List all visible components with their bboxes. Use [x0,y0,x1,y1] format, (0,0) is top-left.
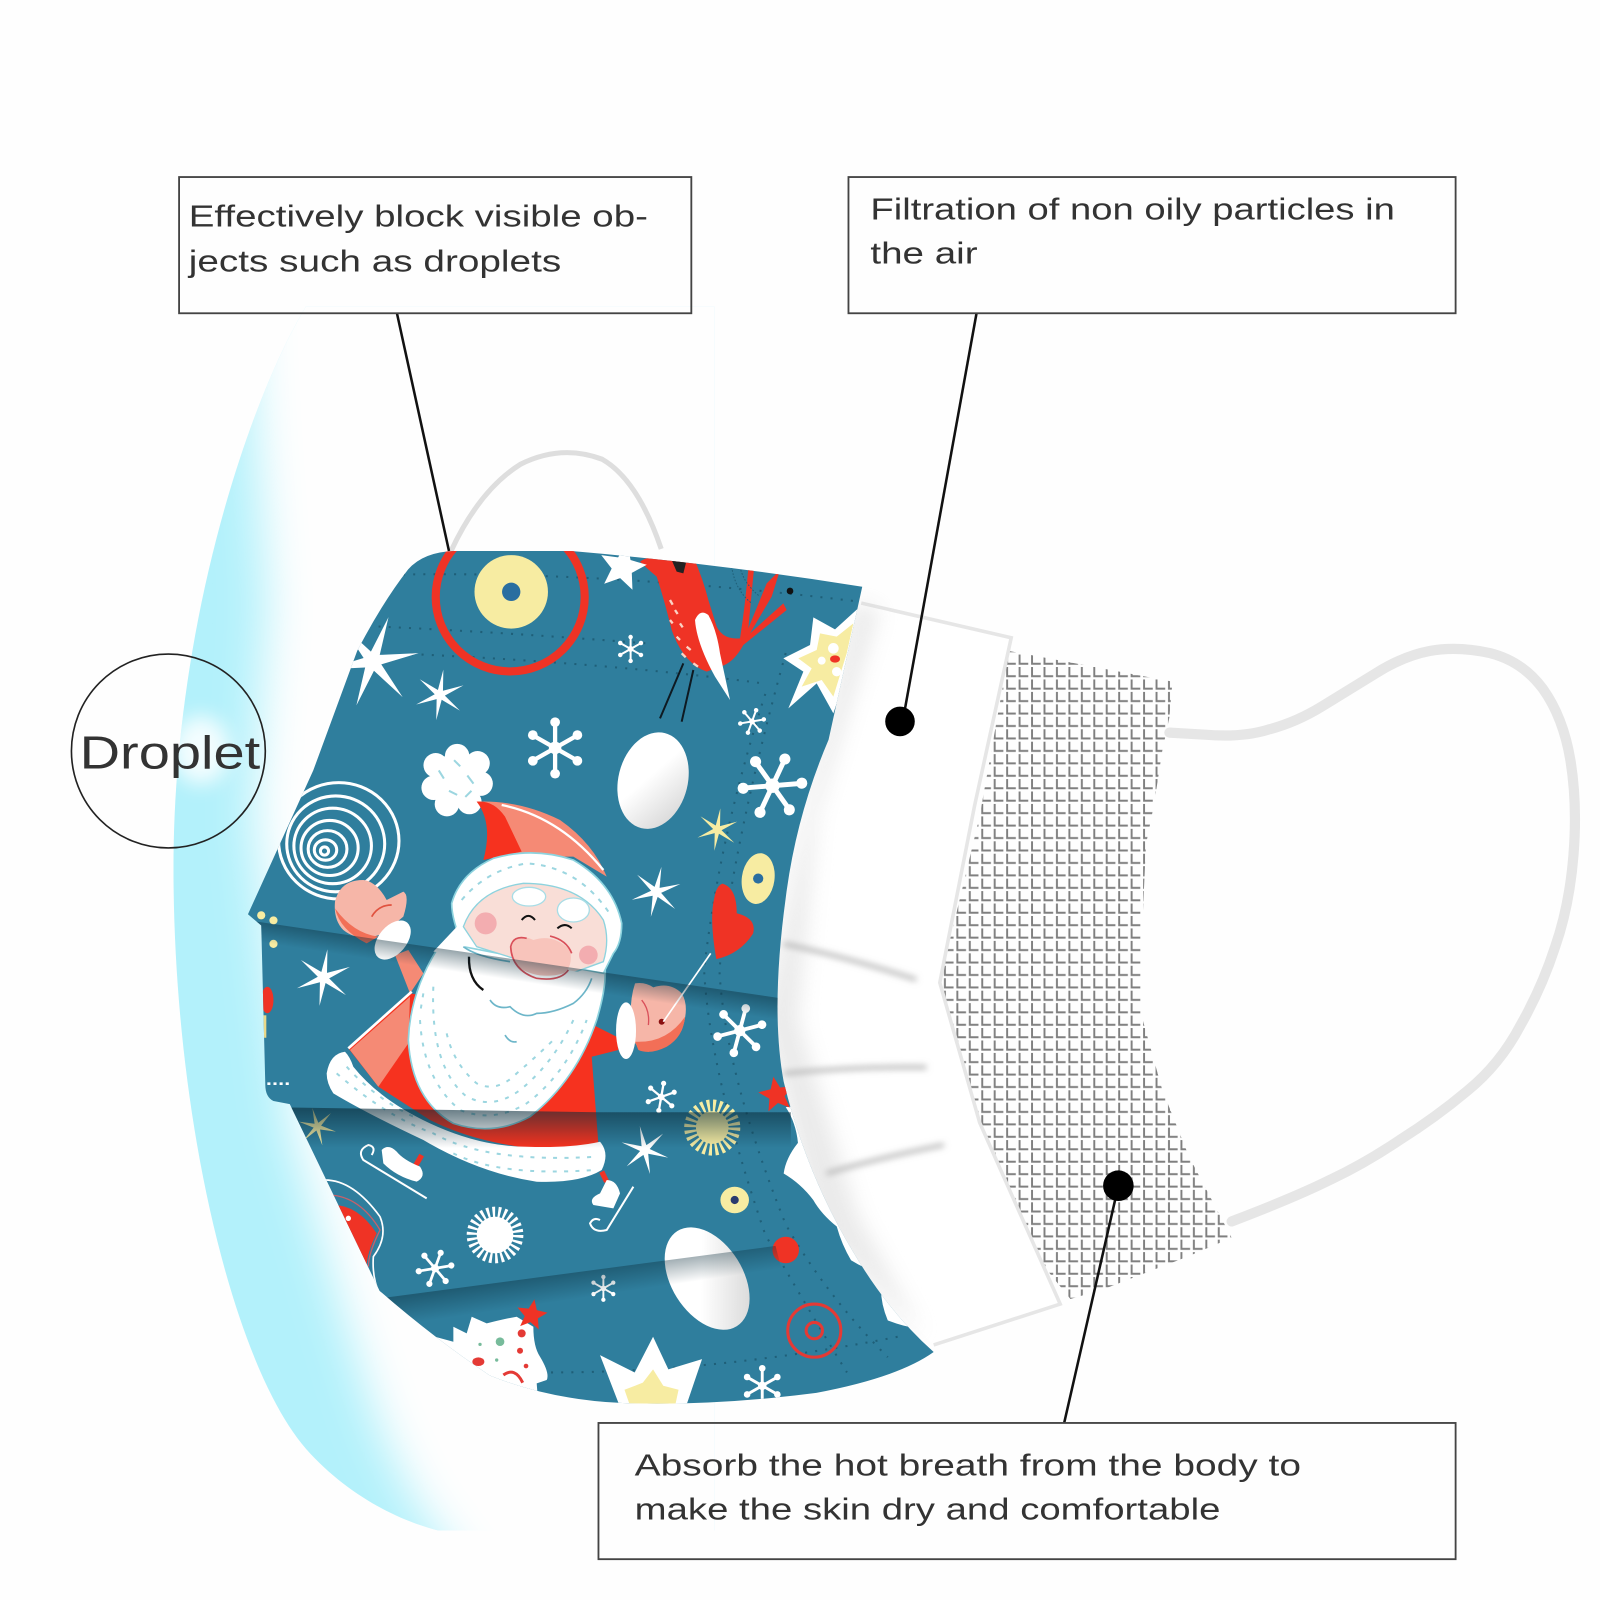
santa nose [511,936,572,979]
santa brows [512,887,589,922]
lower panel decorations [296,1104,633,1427]
callout: block droplets: jects such as droplets [188,244,561,278]
santa face [463,883,607,975]
droplet label circle [71,654,265,848]
santa left arm [395,950,423,993]
santa hat [477,802,607,877]
santa figure [327,802,711,1182]
callout: absorb breath: make the skin dry and comfortable [635,1492,1220,1526]
yellow star right [783,607,860,713]
bird [640,556,793,722]
leader line: absorb [1064,1186,1118,1422]
stitched dotted lines [379,574,898,1372]
red star with tree, right [756,1074,980,1329]
leader line: filtration [903,313,977,719]
pleat shadows [784,944,944,1173]
upper egg [617,732,689,829]
red heart balloon [712,884,754,959]
santa left mitten [334,880,411,960]
santa beard [408,947,605,1129]
small snowflake dots [591,1275,615,1302]
callout: absorb breath [598,1423,1456,1559]
santa upper beard piece [434,926,465,952]
yellow sun [693,1108,732,1147]
santa cheeks [475,912,598,964]
left skate [361,1145,427,1198]
ear loop: top [451,453,661,551]
santa right mitten [616,953,711,1059]
yellow sparkle [698,808,737,850]
marker dot: mesh layer [1103,1170,1134,1201]
christmas tree bottom [435,1297,549,1427]
decorative stars and sparkles [295,539,683,1178]
crown star bottom [600,1337,702,1413]
white middle layer [765,602,1060,1345]
pompon [421,744,493,816]
callout: absorb breath: Absorb the hot breath from the body to [635,1449,1301,1483]
santa coat trim [327,1052,605,1182]
santa legs [415,1155,607,1182]
ear loop: right [1169,649,1575,1221]
shadow next to printed layer [765,602,923,1337]
callout: filtration: the air [870,236,978,270]
leader line: droplets [397,313,449,551]
callout: filtration [848,177,1456,313]
callout: filtration: Filtration of non oily particles in [870,192,1395,226]
small yellow donuts [720,851,778,1213]
callout: block droplets [179,177,691,313]
callout: block droplets: Effectively block visible ob- [189,200,648,234]
top target ring [432,551,589,676]
marker dot: white layer [885,707,915,736]
right skate [590,1180,633,1231]
santa hat trim [452,853,622,973]
droplet label circle: Droplet [80,726,260,778]
lower egg [664,1227,750,1330]
droplet spray crescent [174,306,714,1530]
printed outer mask layer [248,551,934,1404]
yellow star low left [299,1108,336,1146]
white arc at edge [788,832,806,944]
small snowflake left [412,1244,458,1293]
layer edge shading [861,603,1060,1345]
target ring lower [788,1304,841,1357]
red heart with outline [325,1180,383,1298]
mesh filter layer [940,651,1232,1299]
santa eyes [522,916,572,928]
santa moustache and beard scallop [463,947,597,1042]
snowflakes [528,635,815,1406]
santa coat [348,992,618,1148]
spiral [279,783,399,899]
fold shadows [255,921,791,1329]
left edge accents [257,911,290,1084]
white sun [474,1214,516,1256]
bird and yellow star [640,556,860,722]
